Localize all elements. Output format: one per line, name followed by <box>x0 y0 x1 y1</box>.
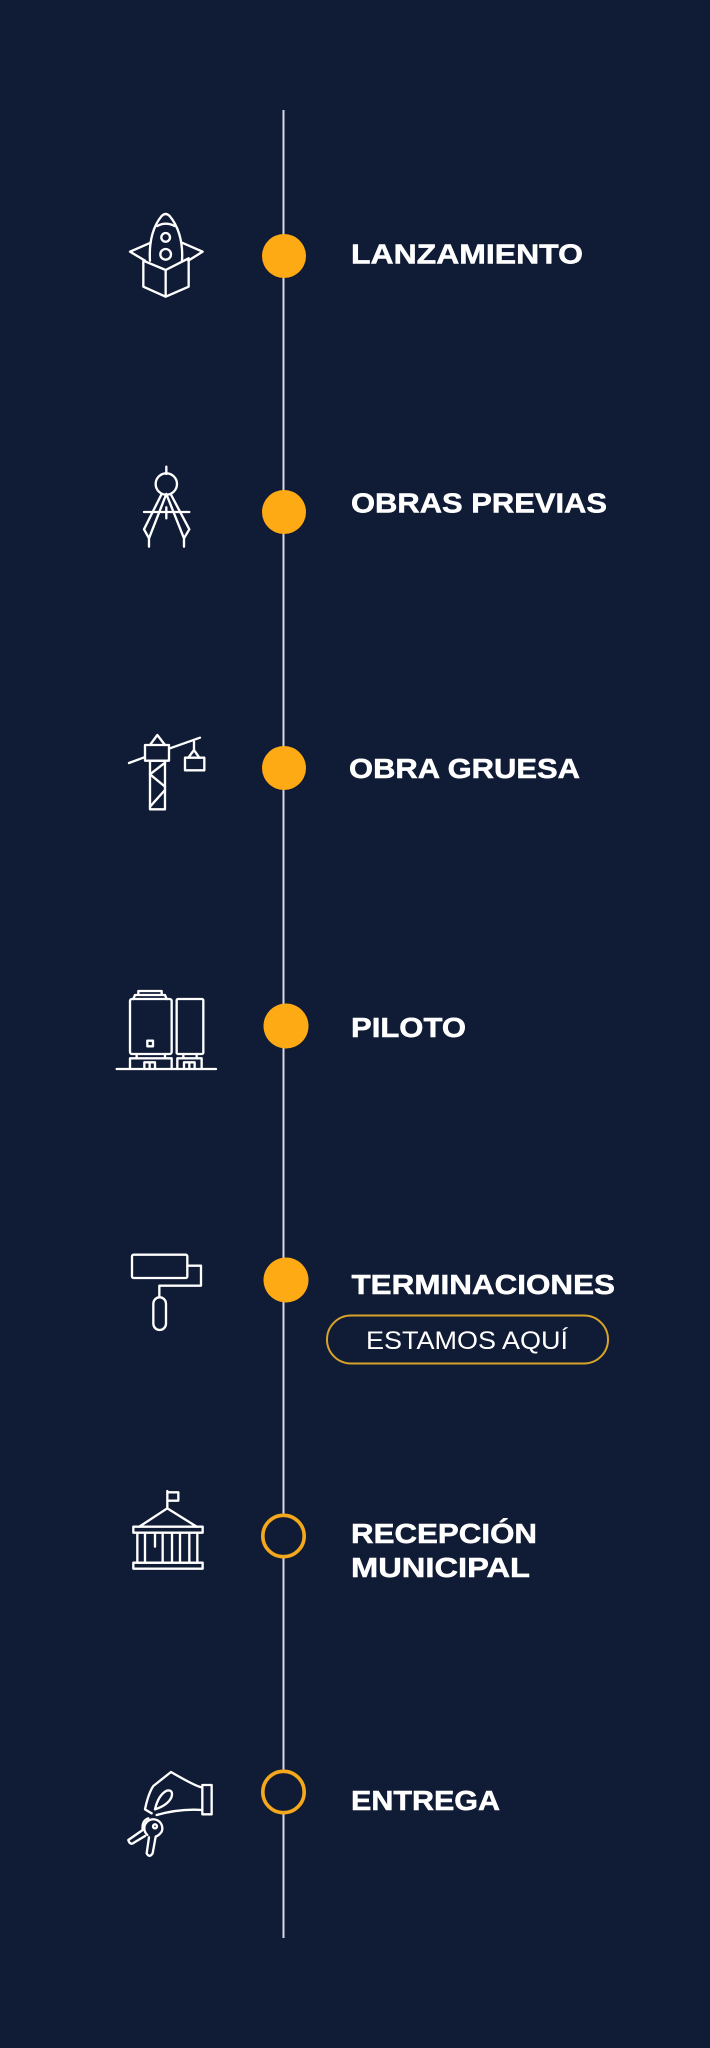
step: Entrega <box>128 1771 500 1856</box>
milestone dot: completed <box>264 1004 308 1048</box>
label: Recepción municipal: RECEPCIÓN <box>351 1518 537 1549</box>
milestone dot: completed <box>262 234 306 278</box>
milestone dot: pending <box>263 1515 304 1557</box>
icon: municipal building <box>133 1491 203 1569</box>
icon: hand holding keys <box>128 1772 212 1856</box>
label: Obra gruesa: OBRA GRUESA <box>349 753 580 784</box>
step: Piloto <box>117 991 466 1069</box>
label: Recepción municipal: MUNICIPAL <box>351 1552 530 1583</box>
step: Obra gruesa <box>129 735 580 809</box>
icon: paint roller <box>132 1255 201 1330</box>
label: Recepción municipal <box>351 1518 537 1583</box>
icon: tower crane <box>129 735 204 809</box>
icon: drafting compass <box>144 467 189 547</box>
milestone dot: current <box>264 1258 308 1302</box>
step: Recepción municipal <box>133 1491 537 1583</box>
vertical timeline axis <box>282 110 284 1938</box>
label: Entrega: ENTREGA <box>351 1785 500 1816</box>
badge: estamos aquí: ESTAMOS AQUÍ <box>366 1326 568 1355</box>
label: Lanzamiento: LANZAMIENTO <box>351 238 583 270</box>
icon: pilot buildings <box>117 991 216 1069</box>
milestone dot: completed <box>262 746 306 790</box>
step: Obras previas <box>144 467 607 547</box>
label: Terminaciones: TERMINACIONES <box>352 1269 615 1300</box>
milestone dot: pending <box>263 1771 304 1813</box>
badge: estamos aquí <box>327 1316 608 1364</box>
icon: rocket in box <box>130 214 203 297</box>
step: Lanzamiento <box>130 214 583 297</box>
step: Terminaciones <box>132 1255 615 1364</box>
label: Obras previas: OBRAS PREVIAS <box>351 488 607 518</box>
label: Piloto: PILOTO <box>351 1012 466 1043</box>
milestone dot: completed <box>262 490 306 534</box>
